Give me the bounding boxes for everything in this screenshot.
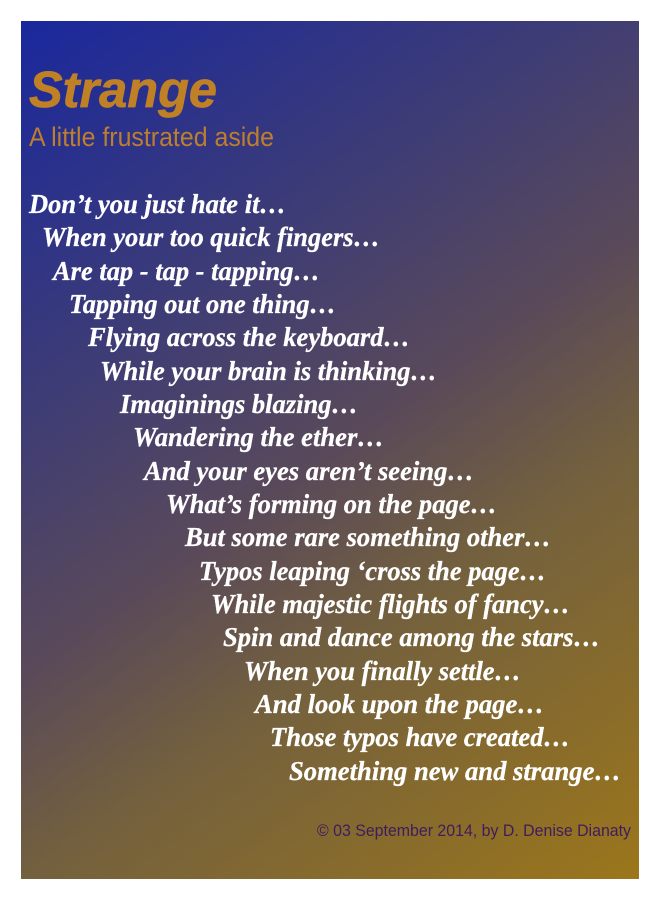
poem text block: Spin and dance among the stars… — [223, 622, 600, 652]
poem text block: And your eyes aren’t seeing… — [142, 456, 474, 486]
poem text block: Are tap - tap - tapping… — [51, 256, 320, 286]
poem text block: While your brain is thinking… — [100, 356, 437, 386]
copyright footer: © 03 September 2014, by D. Denise Dianaty — [317, 822, 632, 840]
poem text block: Don’t you just hate it… — [28, 189, 286, 219]
poem text block: What’s forming on the page… — [166, 489, 497, 519]
poem text block: While majestic flights of fancy… — [211, 589, 570, 619]
subtitle: A little frustrated aside — [29, 122, 274, 152]
poem text block: Imaginings blazing… — [119, 389, 358, 419]
poem text block: When you finally settle… — [244, 656, 521, 686]
poem text block: Typos leaping ‘cross the page… — [199, 556, 546, 586]
poem text block: When your too quick fingers… — [42, 222, 380, 252]
poem text block: Tapping out one thing… — [69, 289, 336, 319]
poem text block: Something new and strange… — [289, 756, 621, 786]
poem text block: And look upon the page… — [253, 689, 544, 719]
poem text block: Flying across the keyboard… — [87, 322, 410, 352]
poem text block: But some rare something other… — [184, 522, 551, 552]
title: Strange — [29, 61, 217, 118]
poem text block — [28, 189, 621, 786]
poem text block: Those typos have created… — [270, 722, 570, 752]
poem text block: Wandering the ether… — [133, 422, 384, 452]
